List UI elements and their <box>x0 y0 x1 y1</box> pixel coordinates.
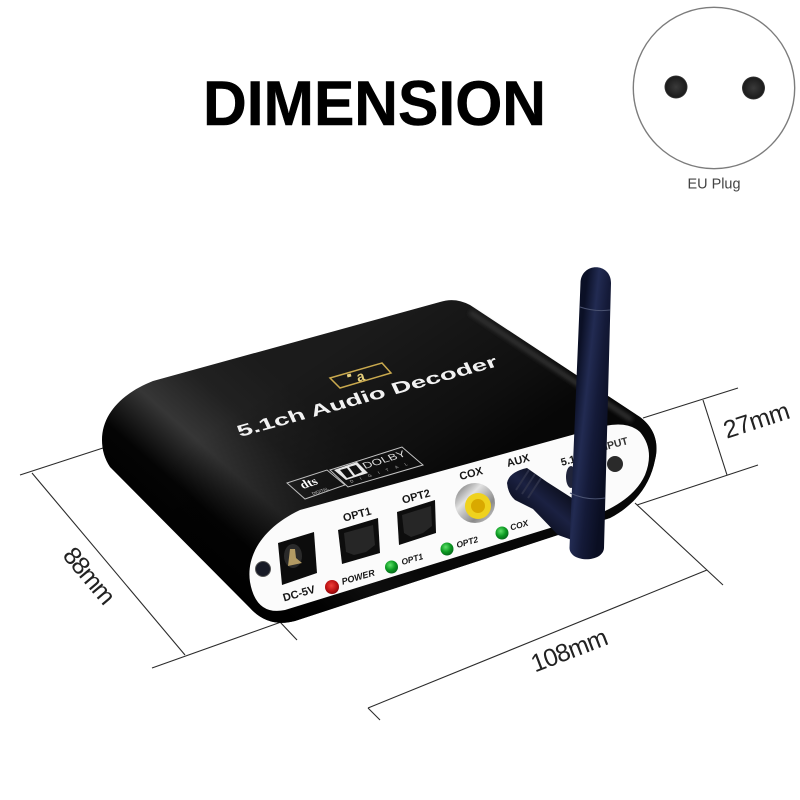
dimension: width 108mm <box>280 503 723 720</box>
optical port 1 <box>338 518 380 564</box>
dts badge: dts <box>297 475 320 491</box>
panel labels: COX <box>509 517 531 532</box>
dolby badge: DOLBY <box>361 449 409 471</box>
product name: 5.1ch Audio Decoder <box>234 352 501 441</box>
device shoulder rim <box>470 312 632 420</box>
front panel <box>249 424 649 611</box>
panel labels: COX <box>458 465 485 483</box>
dimension: height 27mm: 27mm <box>720 397 793 444</box>
device top shading <box>102 300 657 623</box>
panel labels: DC-5V <box>282 584 317 604</box>
dimension: height 27mm <box>637 388 793 505</box>
panel labels: OPT2 <box>455 534 479 550</box>
panel labels: OPT1 <box>342 506 373 525</box>
dimension: width 108mm: 108mm <box>527 623 612 678</box>
dolby badge: DIGITAL <box>349 462 409 484</box>
dimension: depth 88mm <box>20 448 284 668</box>
panel labels: 5.1 <box>560 453 577 469</box>
power jack <box>278 532 317 585</box>
dimension: depth 88mm: 88mm <box>57 542 121 610</box>
antenna connector <box>507 468 572 540</box>
top logo <box>330 363 391 388</box>
antenna collars <box>570 307 610 499</box>
panel labels: IPUT <box>603 435 630 453</box>
top logo: a <box>355 367 367 385</box>
LED indicators <box>325 526 508 594</box>
optical port 2 <box>397 500 436 545</box>
antenna <box>507 267 611 559</box>
panel labels: AUX <box>505 452 532 470</box>
title: DIMENSION <box>203 69 546 139</box>
icon: EU plug <box>633 7 795 169</box>
RCA jack <box>455 483 495 523</box>
dts badge: DIGITAL <box>311 486 330 496</box>
device body <box>102 300 657 623</box>
antenna whip <box>570 267 611 559</box>
panel labels <box>282 435 630 604</box>
dts badge <box>287 470 345 499</box>
panel labels: OPT2 <box>401 488 432 507</box>
input knob <box>566 456 623 488</box>
device <box>102 300 657 623</box>
panel labels: POWER <box>340 567 376 587</box>
screw <box>256 562 270 576</box>
dolby badge <box>330 447 423 487</box>
plug label: EU Plug <box>688 176 740 192</box>
panel labels: OPT1 <box>400 551 424 567</box>
